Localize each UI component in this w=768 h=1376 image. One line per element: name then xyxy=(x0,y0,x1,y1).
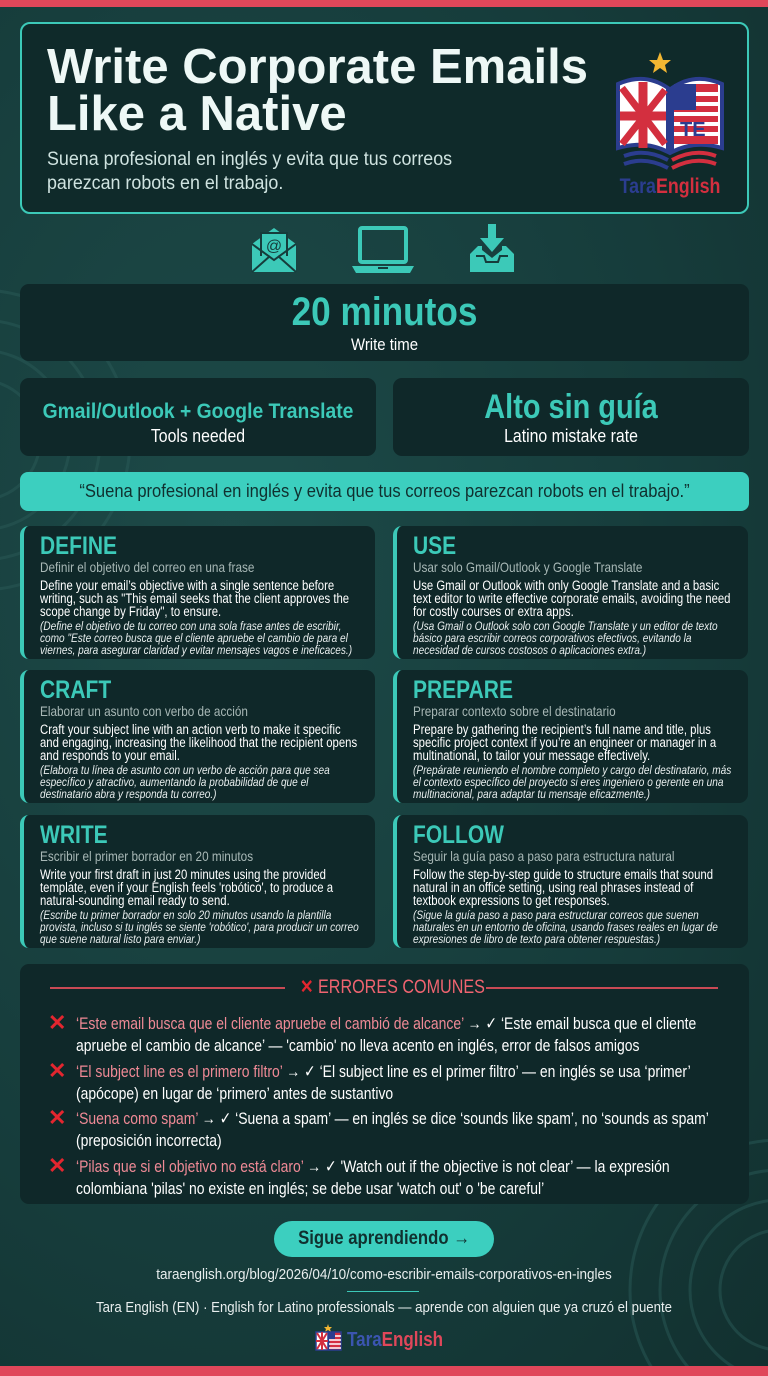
title: Write Corporate Emails xyxy=(47,40,588,94)
stat: mistake rate: Latino mistake rate xyxy=(504,426,638,446)
card: CRAFT: Elaborar un asunto con verbo de acción xyxy=(40,703,248,719)
error 3: ‘Suena como spam’ → ✓ ‘Suena a spam’ — en inglés se dice ‘sounds like spam’, no ‘sounds as spam’ (preposición incorrecta) xyxy=(76,1109,708,1150)
error 2: ✕ xyxy=(48,1058,66,1083)
card: DEFINE: Define your email’s objective with a single sentence before writing, such as "This email seeks that the client approves the scope change by Friday", to ensure. xyxy=(40,578,349,619)
logo: TaraEnglish xyxy=(620,175,720,198)
card: CRAFT: CRAFT xyxy=(40,676,111,704)
stat: write time: Write time xyxy=(351,335,418,354)
card: USE: Usar solo Gmail/Outlook y Google Translate xyxy=(413,559,642,575)
subtitle: parezcan robots en el trabajo. xyxy=(47,173,283,194)
header panel xyxy=(20,22,749,214)
card: PREPARE: Preparar contexto sobre el destinatario xyxy=(413,703,616,719)
card: CRAFT xyxy=(20,670,375,803)
tagline: Tara English (EN) · English for Latino professionals — aprende con alguien que ya cruzó el puente xyxy=(96,1299,672,1316)
card: PREPARE: PREPARE xyxy=(413,676,513,704)
error 4: ✕ xyxy=(48,1153,66,1178)
logo: TE xyxy=(680,119,706,141)
icon: envelope: @ xyxy=(266,238,282,255)
stat: write time: 20 minutos xyxy=(292,290,477,334)
card: DEFINE xyxy=(20,526,375,659)
card: USE: USE xyxy=(413,532,456,560)
errors heading: ✕ ERRORES COMUNES xyxy=(300,977,485,998)
stat: write time xyxy=(20,284,749,361)
card: FOLLOW: Follow the step-by-step guide to structure emails that sound natural in an office setting, using real phrases instead of textbook expressions to get responses. xyxy=(413,867,713,908)
card: WRITE: WRITE xyxy=(40,821,108,849)
bottom red bar xyxy=(0,1366,768,1376)
logo xyxy=(616,52,724,198)
error 4: ‘Pilas que si el objetivo no está claro’ → ✓ 'Watch out if the objective is not clear’ — la expresión colombiana 'pilas' no existe en inglés; se debe usar 'watch out' o 'be careful’ xyxy=(76,1157,670,1198)
card: USE: Use Gmail or Outlook with only Google Translate and a basic text editor to write effective corporate emails, avoiding the need for costly courses or extra apps. xyxy=(413,578,730,619)
card: DEFINE: DEFINE xyxy=(40,532,117,560)
stat: mistake rate: Alto sin guía xyxy=(484,388,658,426)
title xyxy=(47,40,588,141)
card: PREPARE xyxy=(393,670,748,803)
card: FOLLOW xyxy=(393,815,748,948)
card: USE xyxy=(393,526,748,659)
error 1: ‘Este email busca que el cliente apruebe el cambió de alcance’ → ✓ ‘Este email busca que el cliente apruebe el cambio de alcance’ — 'cambio' no lleva acento en inglés, error de falsos amigos xyxy=(76,1014,696,1055)
icon row xyxy=(252,224,514,273)
subtitle: Suena profesional en inglés y evita que tus correos xyxy=(47,149,452,170)
card: DEFINE: (Define el objetivo de tu correo con una sola frase antes de escribir, como "Este correo busca que el cliente apruebe el cambio de para el viernes, para asegurar claridad y evitar mensajes vagos e ineficaces.) xyxy=(40,619,352,657)
url: taraenglish.org/blog/2026/04/10/como-escribir-emails-corporativos-en-ingles xyxy=(156,1266,612,1283)
error 2: ‘El subject line es el primero filtro’ → ✓ ‘El subject line es el primer filtro’ — en inglés se usa ‘primer’ (apócope) en lugar de ‘primero’ antes de sustantivo xyxy=(76,1062,690,1103)
stat: tools: Tools needed xyxy=(151,426,245,446)
stat: tools: Gmail/Outlook + Google Translate xyxy=(43,400,353,423)
card: WRITE: Write your first draft in just 20 minutes using the provided template, even if your English feels 'robótico', to produce a natural-sounding email ready to send. xyxy=(40,867,333,908)
icon: envelope xyxy=(252,228,296,272)
card: PREPARE: Prepare by gathering the recipient’s full name and title, plus specific project context if you’re an engineer or manager in a multinational, to tailor your message effectively. xyxy=(413,722,716,763)
top red bar xyxy=(0,0,768,7)
icon: download tray xyxy=(470,224,514,272)
button: sigue aprendiendo: Sigue aprendiendo → xyxy=(298,1228,470,1249)
error 3: ✕ xyxy=(48,1105,66,1130)
footer logo: TaraEnglish xyxy=(347,1329,443,1351)
title: Like a Native xyxy=(47,87,347,141)
stat: tools xyxy=(20,378,376,456)
card: FOLLOW: Seguir la guía paso a paso para estructura natural xyxy=(413,848,675,864)
card: USE: (Usa Gmail o Outlook solo con Google Translate y un editor de texto básico para escribir correos corporativos efectivos, evitando la necesidad de cursos costosos o aplicaciones extra.) xyxy=(413,619,718,657)
subtitle xyxy=(47,149,452,194)
card: CRAFT: Craft your subject line with an action verb to make it specific and engaging, increasing the likelihood that the recipient opens and responds to your email. xyxy=(40,722,357,763)
card: FOLLOW: FOLLOW xyxy=(413,821,504,849)
card: PREPARE: (Prepárate reuniendo el nombre completo y cargo del destinatario, más el contexto específico del proyecto si eres ingeniero o gerente en una multinacional, para adaptar tu mensaje eficazmente.) xyxy=(413,763,731,801)
card: DEFINE: Definir el objetivo del correo en una frase xyxy=(40,559,254,575)
card: FOLLOW: (Sigue la guía paso a paso para estructurar correos que suenen naturales en un entorno de oficina, usando frases reales en lugar de expresiones de libro de texto para obtener respuestas.) xyxy=(413,908,718,946)
card: WRITE: Escribir el primer borrador en 20 minutos xyxy=(40,848,253,864)
card: WRITE xyxy=(20,815,375,948)
quote bar: “Suena profesional en inglés y evita que tus correos parezcan robots en el trabajo.” xyxy=(79,481,690,501)
card: CRAFT: (Elabora tu línea de asunto con un verbo de acción para que sea específico y atractivo, aumentando la probabilidad de que el destinatario abra y responda tu correo.) xyxy=(40,763,330,801)
quote bar xyxy=(20,472,749,511)
button: sigue aprendiendo xyxy=(274,1221,494,1257)
card: WRITE: (Escribe tu primer borrador en solo 20 minutos usando la plantilla provista, incluso si tu inglés se siente 'robótico', para producir un correo que suene natural listo para enviar.) xyxy=(40,908,359,946)
stat: mistake rate xyxy=(393,378,749,456)
error 1: ✕ xyxy=(48,1010,66,1035)
icon: laptop xyxy=(352,226,414,273)
footer logo xyxy=(315,1324,443,1351)
panel: errores comunes xyxy=(20,964,749,1204)
